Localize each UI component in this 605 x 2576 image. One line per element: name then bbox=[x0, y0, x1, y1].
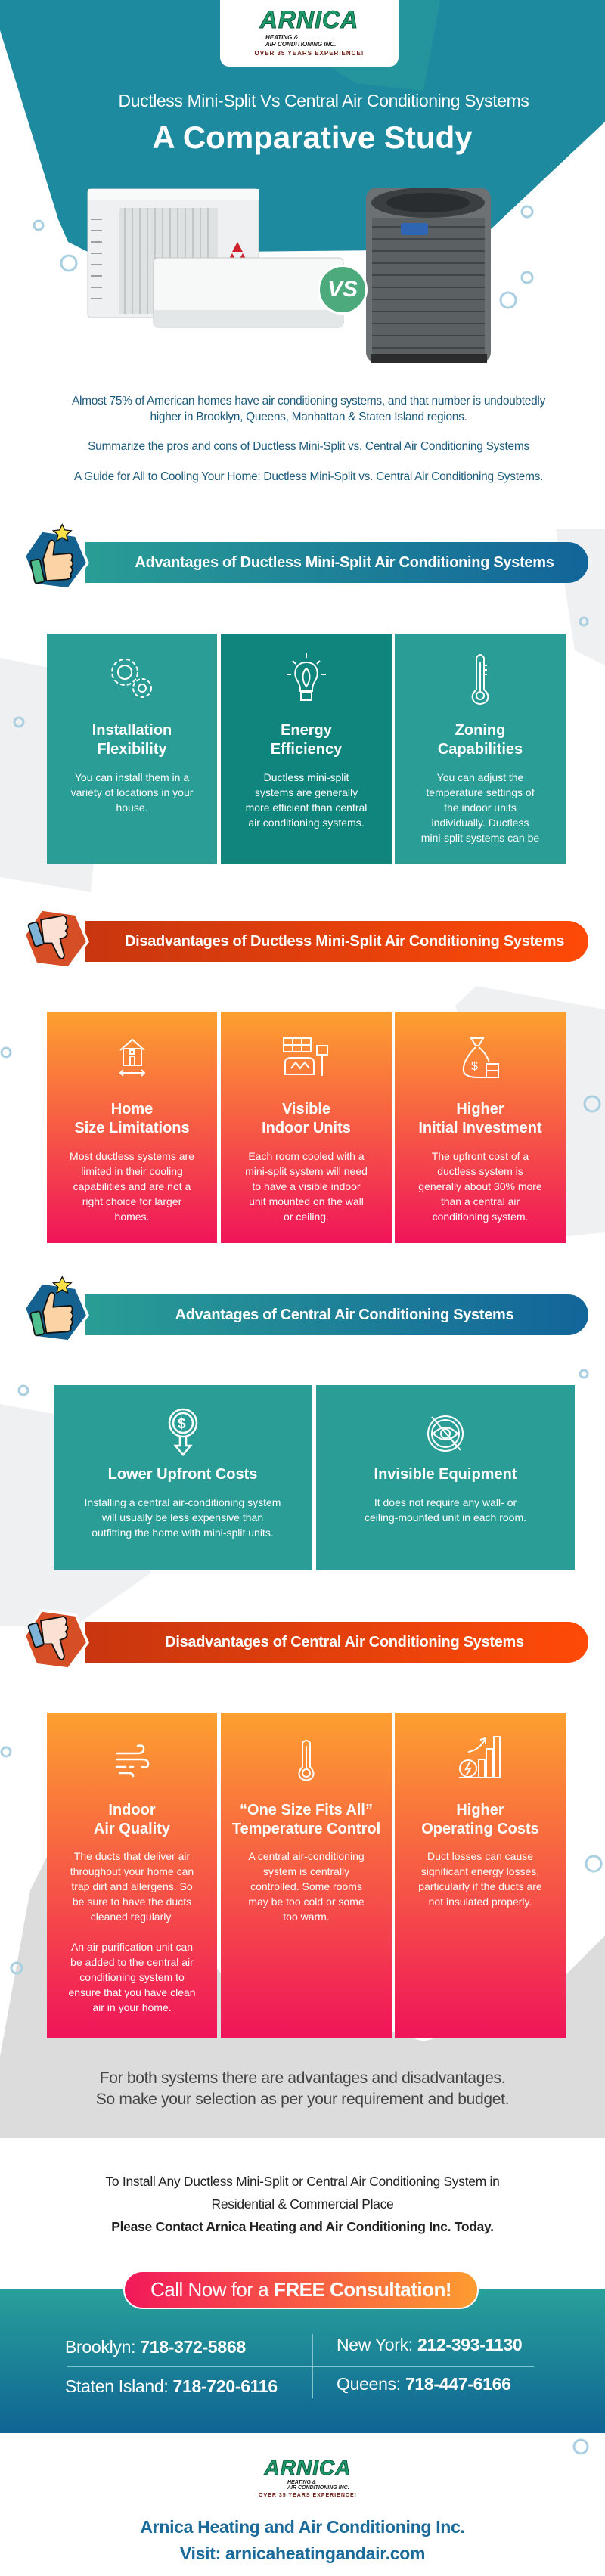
panel: ductless disadvantages cards bbox=[47, 1012, 566, 1243]
footer logo: HEATING & bbox=[287, 2480, 316, 2485]
card: indoor air quality: throughout your home can bbox=[70, 1865, 194, 1877]
logo top: OVER 35 YEARS EXPERIENCE! bbox=[255, 50, 364, 57]
section 3 header: Advantages of Central Air Conditioning Systems bbox=[175, 1307, 513, 1323]
card: zoning capabilities: the indoor units bbox=[444, 801, 517, 814]
logo top: ARNICA bbox=[260, 6, 358, 33]
card: invisible equipment: ceiling-mounted unit in each room. bbox=[365, 1511, 526, 1524]
section 1 header: Advantages of Ductless Mini-Split Air Conditioning Systems bbox=[135, 554, 554, 571]
card: one size fits all: too warm. bbox=[283, 1911, 330, 1923]
footer logo: OVER 35 YEARS EXPERIENCE! bbox=[259, 2493, 357, 2498]
phone numbers grid: Brooklyn: 718-372-5868 bbox=[65, 2337, 246, 2357]
card: indoor air quality: be added to the central air bbox=[70, 1956, 194, 1968]
card: invisible equipment bbox=[316, 1385, 575, 1570]
card: higher initial investment: Initial Investment bbox=[418, 1120, 542, 1136]
logo top bbox=[220, 0, 399, 67]
card: indoor air quality: air in your home. bbox=[92, 2001, 172, 2013]
card: lower upfront costs: outfitting the home with mini-split units. bbox=[92, 1527, 274, 1539]
card: home size limitations: Size Limitations bbox=[74, 1120, 190, 1136]
card: higher initial investment: generally about 30% more bbox=[418, 1180, 542, 1192]
call to action text: To Install Any Ductless Mini-Split or Central Air Conditioning System in bbox=[105, 2174, 500, 2189]
company name and website bbox=[140, 2517, 465, 2563]
card: indoor air quality: be sure to have the ducts bbox=[73, 1896, 191, 1908]
card: higher operating costs: Operating Costs bbox=[421, 1821, 539, 1837]
card: one size fits all: controlled. Some rooms bbox=[250, 1880, 362, 1892]
footer logo bbox=[259, 2456, 357, 2498]
subtitle: Ductless Mini-Split Vs Central Air Conditioning Systems bbox=[118, 91, 529, 110]
card: higher operating costs: Higher bbox=[456, 1802, 504, 1818]
card: higher initial investment bbox=[395, 1012, 566, 1243]
card: zoning capabilities bbox=[395, 634, 566, 864]
section 1 header bbox=[85, 542, 588, 583]
card: home size limitations: capabilities and are not a bbox=[73, 1180, 191, 1192]
card: lower upfront costs: Installing a central air-conditioning system bbox=[85, 1496, 281, 1508]
panel: central disadvantages cards bbox=[47, 1713, 566, 2038]
card: energy efficiency bbox=[221, 634, 392, 864]
card: invisible equipment: Invisible Equipment bbox=[374, 1466, 517, 1483]
card: home size limitations: homes. bbox=[115, 1211, 149, 1223]
card: energy efficiency: Ductless mini-split bbox=[264, 771, 349, 783]
VS badge bbox=[318, 265, 368, 315]
closing text: So make your selection as per your requirement and budget. bbox=[96, 2091, 509, 2108]
card: installation flexibility bbox=[47, 634, 217, 864]
company name and website: Visit: arnicaheatingandair.com bbox=[180, 2543, 425, 2563]
card: energy efficiency: Efficiency bbox=[271, 741, 342, 758]
logo top: HEATING & bbox=[265, 34, 298, 41]
card: zoning capabilities: You can adjust the bbox=[437, 771, 523, 783]
icon: thumbs down hexagon bbox=[26, 1609, 89, 1668]
card: lower upfront costs: will usually be less expensive than bbox=[102, 1511, 263, 1524]
call now button: Call Now for a FREE Consultation! bbox=[150, 2278, 451, 2301]
intro text: Almost 75% of American homes have air conditioning systems, and that number is undoubtedly bbox=[72, 395, 545, 408]
intro text: higher in Brooklyn, Queens, Manhattan & Staten Island regions. bbox=[150, 411, 467, 423]
card: indoor air quality: An air purification unit can bbox=[71, 1941, 193, 1953]
card: installation flexibility: Flexibility bbox=[97, 741, 167, 758]
intro text bbox=[72, 395, 546, 423]
card: one size fits all: A central air-conditioning bbox=[248, 1850, 365, 1862]
card: home size limitations: Home bbox=[111, 1101, 153, 1118]
section 2 header: Disadvantages of Ductless Mini-Split Air Conditioning Systems bbox=[125, 933, 564, 950]
card: indoor air quality: Air Quality bbox=[94, 1821, 170, 1837]
card: visible indoor units: unit mounted on the wall bbox=[249, 1195, 364, 1207]
card: home size limitations: limited in their cooling bbox=[81, 1165, 183, 1177]
card: indoor air quality bbox=[47, 1713, 217, 2038]
footer logo: ARNICA bbox=[265, 2456, 351, 2479]
card: higher operating costs bbox=[395, 1713, 566, 2038]
card: visible indoor units: Indoor Units bbox=[262, 1120, 351, 1136]
card: one size fits all: may be too cold or some bbox=[248, 1896, 365, 1908]
card: zoning capabilities: temperature settings of bbox=[426, 786, 535, 798]
card: visible indoor units: Visible bbox=[282, 1101, 330, 1118]
card: higher initial investment: Higher bbox=[456, 1101, 504, 1118]
icon: thumbs up hexagon bbox=[26, 523, 89, 588]
section 4 header: Disadvantages of Central Air Conditioning Systems bbox=[165, 1634, 524, 1651]
icon: thumbs down hexagon bbox=[26, 910, 89, 966]
panel: central advantages cards bbox=[54, 1385, 575, 1570]
card: installation flexibility: variety of locations in your bbox=[71, 786, 193, 798]
card: zoning capabilities: Capabilities bbox=[438, 741, 523, 758]
section 2 header bbox=[85, 921, 588, 962]
card: higher operating costs: Duct losses can cause bbox=[427, 1850, 533, 1862]
card: home size limitations: Most ductless systems are bbox=[70, 1150, 194, 1162]
company name and website: Arnica Heating and Air Conditioning Inc. bbox=[140, 2517, 465, 2537]
section 3 header bbox=[85, 1294, 588, 1335]
text: A Guide for All to Cooling Your Home: Ductless Mini-Split vs. Central Air Conditioning Systems. bbox=[74, 470, 543, 483]
card: visible indoor units: mini-split system will need bbox=[245, 1165, 368, 1177]
closing text: For both systems there are advantages and disadvantages. bbox=[100, 2069, 505, 2087]
card: energy efficiency: Energy bbox=[281, 722, 332, 739]
card: higher initial investment: $ bbox=[471, 1060, 478, 1073]
call to action text: Please Contact Arnica Heating and Air Conditioning Inc. Today. bbox=[111, 2219, 494, 2234]
card: visible indoor units: or ceiling. bbox=[284, 1211, 329, 1223]
phone numbers grid: New York: 212-393-1130 bbox=[337, 2335, 522, 2354]
card: higher initial investment: conditioning system. bbox=[433, 1211, 528, 1223]
call now button bbox=[123, 2271, 479, 2309]
card: home size limitations bbox=[47, 1012, 217, 1243]
VS badge: VS bbox=[327, 277, 358, 302]
title: A Comparative Study bbox=[152, 119, 473, 155]
card: installation flexibility: You can install them in a bbox=[75, 771, 189, 783]
phone numbers grid: Staten Island: 718-720-6116 bbox=[65, 2376, 278, 2396]
closing text bbox=[96, 2069, 509, 2108]
card: higher initial investment: ductless system is bbox=[437, 1165, 523, 1177]
card: higher operating costs: not insulated properly. bbox=[429, 1896, 532, 1908]
card: higher initial investment: than a central air bbox=[441, 1195, 520, 1207]
card: installation flexibility: Installation bbox=[92, 722, 172, 739]
card: zoning capabilities: mini-split systems can be bbox=[421, 832, 539, 844]
card: indoor air quality: cleaned regularly. bbox=[91, 1911, 173, 1923]
card: visible indoor units bbox=[221, 1012, 392, 1243]
card: energy efficiency: systems are generally bbox=[255, 786, 358, 798]
phone numbers grid bbox=[65, 2334, 534, 2398]
section 4 header bbox=[85, 1622, 588, 1663]
card: indoor air quality: ensure that you have clean bbox=[68, 1986, 196, 1998]
card: higher initial investment: The upfront cost of a bbox=[432, 1150, 529, 1162]
card: energy efficiency: air conditioning systems. bbox=[248, 817, 365, 829]
card: indoor air quality: conditioning system to bbox=[79, 1971, 185, 1983]
card: one size fits all bbox=[221, 1713, 392, 2038]
phone numbers grid: Queens: 718-447-6166 bbox=[337, 2374, 511, 2394]
card: zoning capabilities: Zoning bbox=[455, 722, 505, 739]
card: lower upfront costs: Lower Upfront Costs bbox=[108, 1466, 257, 1483]
card: visible indoor units: to have a visible indoor bbox=[252, 1180, 361, 1192]
card: invisible equipment: It does not require any wall- or bbox=[374, 1496, 517, 1508]
card: indoor air quality: The ducts that deliver air bbox=[74, 1850, 190, 1862]
logo top: AIR CONDITIONING INC. bbox=[265, 41, 336, 48]
card: higher operating costs: significant energy losses, bbox=[421, 1865, 539, 1877]
card: lower upfront costs bbox=[54, 1385, 312, 1570]
card: zoning capabilities: individually. Ductless bbox=[432, 817, 529, 829]
card: energy efficiency: more efficient than central bbox=[246, 801, 367, 814]
contact band bbox=[0, 2289, 605, 2433]
icon: thumbs up hexagon bbox=[26, 1276, 89, 1340]
card: one size fits all: “One Size Fits All” bbox=[240, 1802, 373, 1818]
products illustration bbox=[88, 188, 491, 363]
call to action text bbox=[105, 2174, 500, 2234]
card: one size fits all: system is centrally bbox=[263, 1865, 349, 1877]
card: indoor air quality: Indoor bbox=[108, 1802, 156, 1818]
footer logo: AIR CONDITIONING INC. bbox=[287, 2485, 349, 2491]
card: home size limitations: right choice for larger bbox=[82, 1195, 182, 1207]
card: one size fits all: Temperature Control bbox=[232, 1821, 380, 1837]
text: Summarize the pros and cons of Ductless Mini-Split vs. Central Air Conditioning Systems bbox=[88, 440, 529, 453]
call to action text: Residential & Commercial Place bbox=[212, 2196, 393, 2212]
card: indoor air quality: trap dirt and allergens. So bbox=[71, 1880, 193, 1892]
card: visible indoor units: Each room cooled with a bbox=[248, 1150, 365, 1162]
card: higher operating costs: particularly if the ducts are bbox=[418, 1880, 542, 1892]
card: lower upfront costs: $ bbox=[177, 1416, 186, 1432]
panel: ductless advantages cards bbox=[47, 634, 566, 864]
card: installation flexibility: house. bbox=[116, 801, 148, 814]
